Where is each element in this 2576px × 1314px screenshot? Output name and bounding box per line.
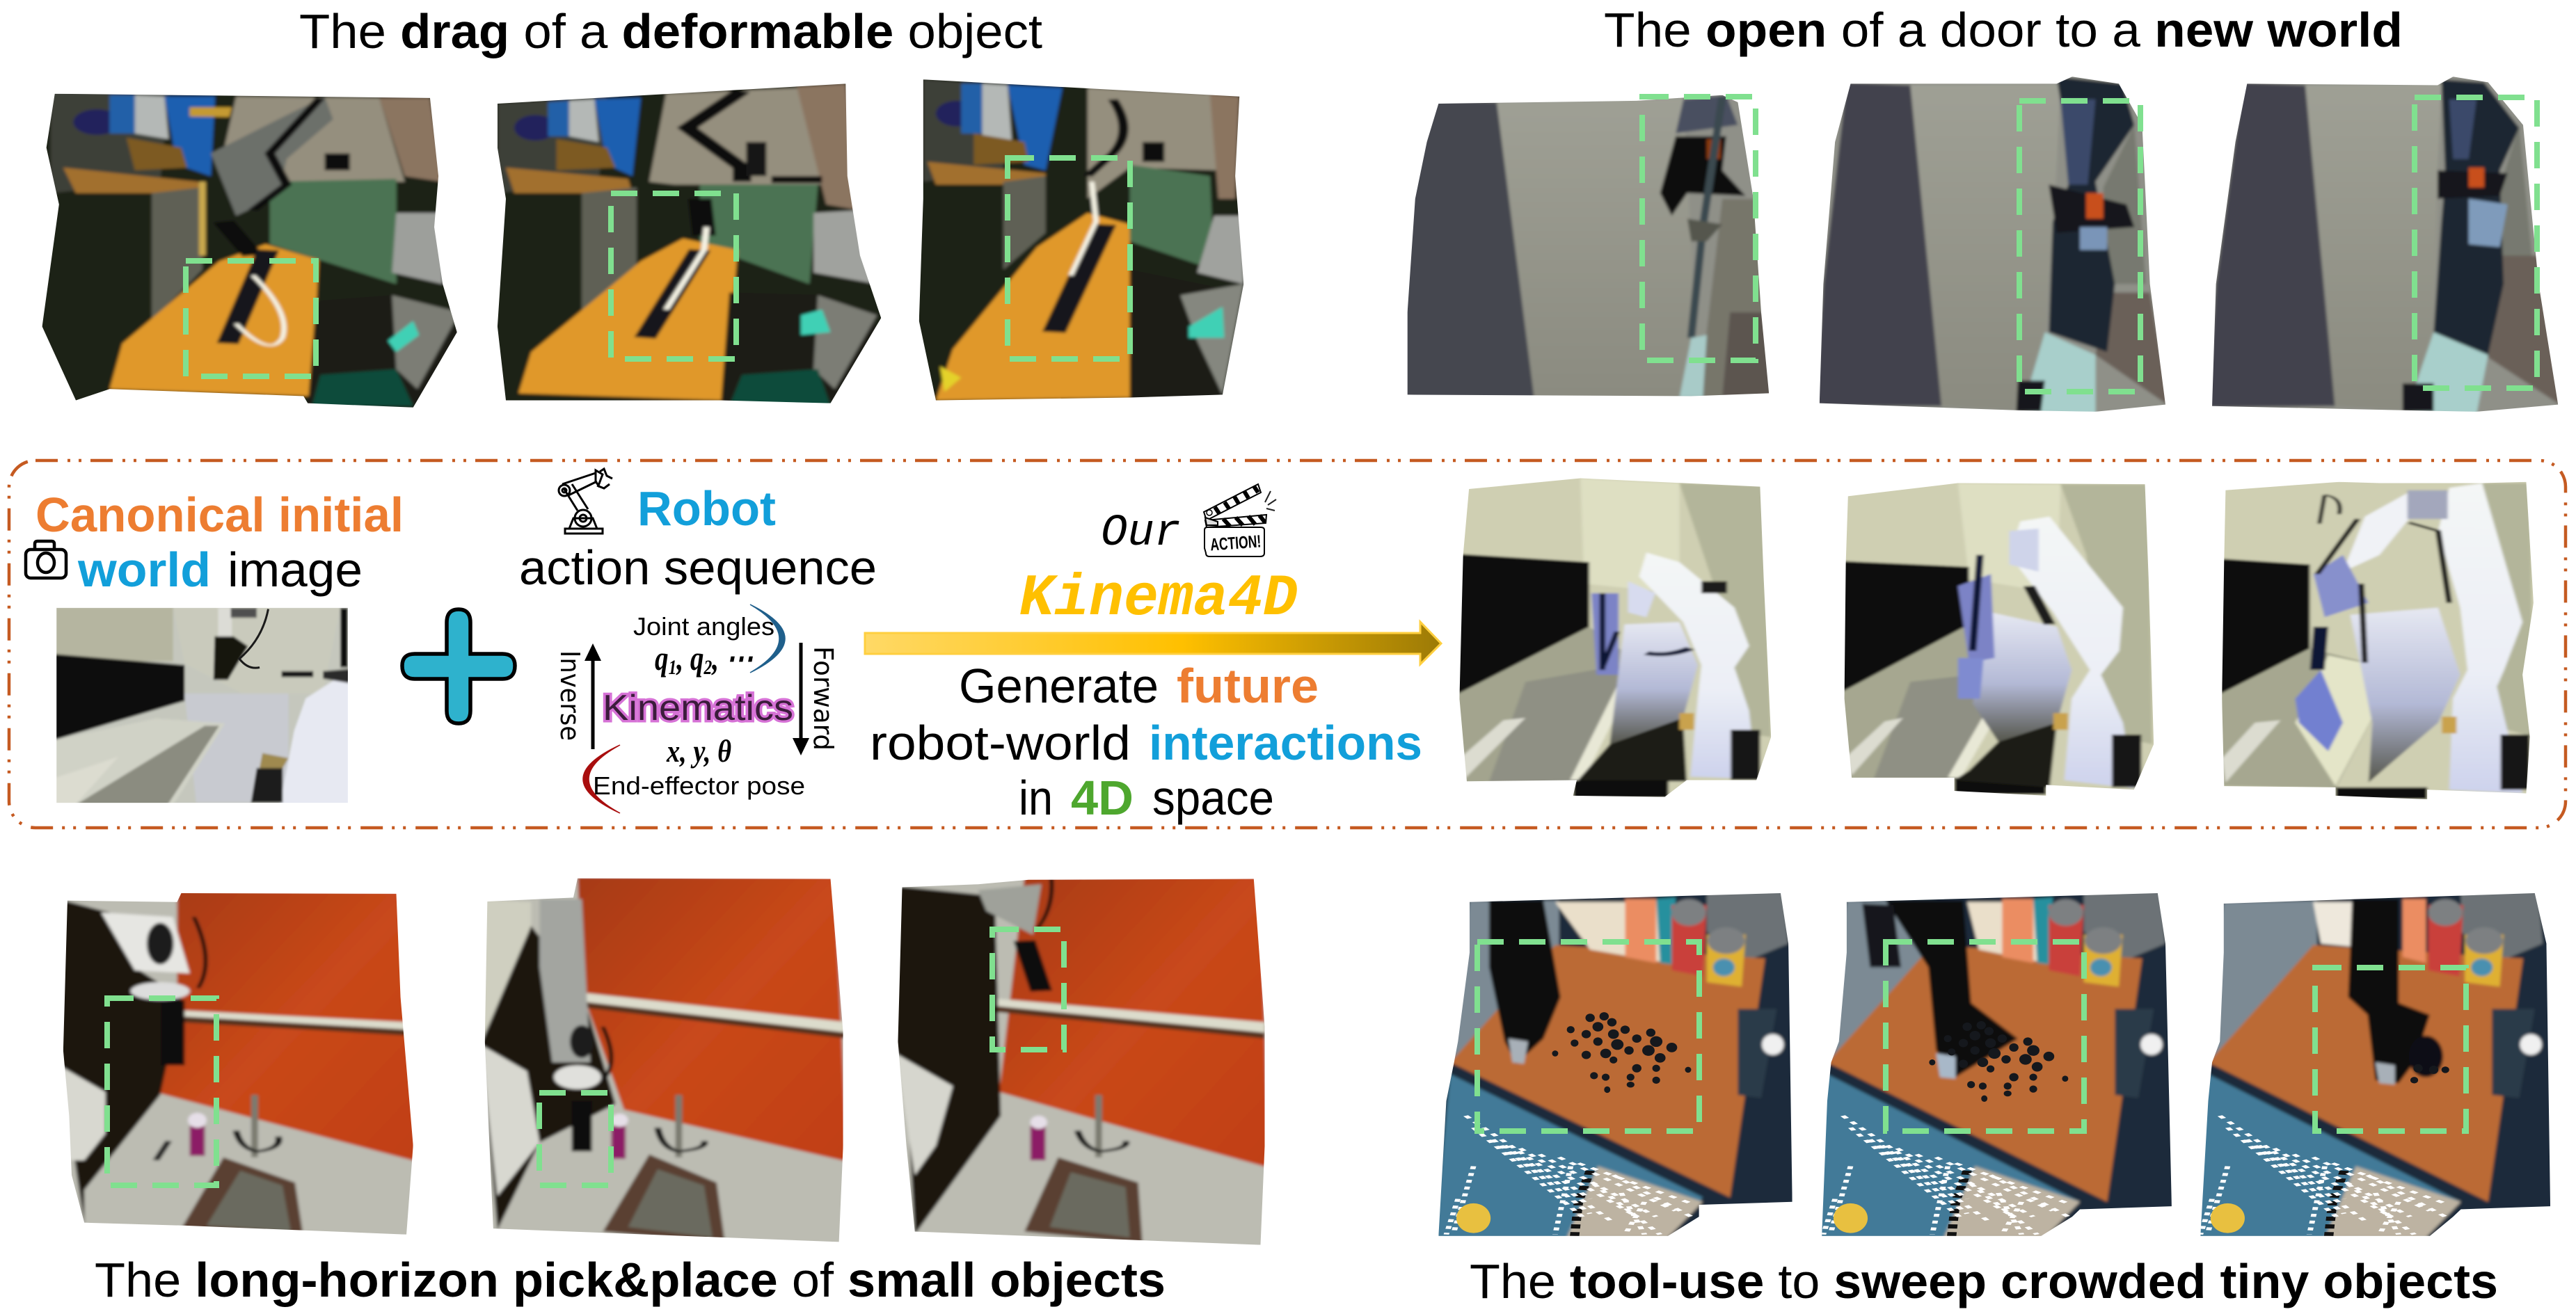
icon: clapperboard: ACTION!	[1209, 531, 1262, 554]
frame: generated step 2	[1834, 481, 2163, 799]
joint symbols: 2	[703, 656, 712, 679]
icon: clapperboard	[1204, 484, 1276, 556]
text: generate future: future	[1177, 659, 1319, 713]
arrow: forward	[793, 643, 809, 755]
text: in 4D space: 4D	[1071, 771, 1134, 825]
heading: drag: The drag of a deformable object	[299, 4, 1042, 58]
joint symbols: q	[655, 639, 672, 678]
heading: world image: world	[77, 543, 211, 597]
highlight boxes: pick	[107, 929, 1064, 1185]
heading: tool-use: The tool-use to sweep crowded tiny objects	[1470, 1254, 2498, 1308]
arrow: inverse	[585, 643, 601, 749]
kinematics diagram	[555, 604, 838, 813]
joint symbols: 1	[669, 656, 676, 679]
frame: drag step 2	[481, 79, 893, 406]
initial world image	[52, 607, 352, 806]
text: in 4D space: in	[1019, 771, 1053, 825]
joint symbols: , q	[676, 639, 704, 678]
end effector label: End-effector pose	[593, 771, 805, 800]
heading: robot: Robot	[637, 481, 776, 536]
text: generate future: Generate	[959, 659, 1159, 713]
frame: pick step 1	[51, 890, 422, 1237]
label: our: Our	[1101, 508, 1181, 559]
pose symbols: x, y, θ	[666, 733, 731, 769]
heading: open: The open of a door to a new world	[1604, 3, 2403, 57]
icon: plus	[402, 609, 515, 723]
heading: world image	[77, 543, 363, 597]
frame: sweep step 2	[1812, 890, 2185, 1239]
frame: pick step 3	[885, 875, 1282, 1249]
highlight boxes: drag	[186, 158, 1130, 376]
frame: drag step 3	[903, 77, 1256, 403]
heading: canonical initial: Canonical initial	[35, 488, 404, 542]
label: forward: Forward	[808, 646, 838, 751]
arrow: generation	[865, 622, 1441, 664]
panel: drag of a deformable object	[25, 4, 1256, 415]
text: robot-world interactions	[870, 716, 1422, 770]
joint symbols: , ⋯	[711, 639, 753, 678]
text: robot-world interactions: interactions	[1149, 716, 1422, 770]
highlight boxes: door	[1642, 97, 2537, 392]
title: Kinema4D: Kinema4D	[1019, 566, 1298, 632]
frame: door step 2	[1808, 74, 2181, 415]
icon: camera	[26, 541, 66, 578]
frame: generated step 1	[1449, 476, 1786, 799]
dashed frame	[9, 460, 2566, 828]
label: kinematics: Kinematics	[603, 688, 793, 728]
panel: open a door	[1388, 3, 2574, 415]
frame: door step 1	[1407, 95, 1769, 396]
panel: pick and place	[51, 875, 1282, 1307]
frame: drag step 1	[42, 93, 457, 408]
text: robot-world interactions: robot-world	[870, 716, 1131, 770]
frame: sweep step 3	[2193, 890, 2566, 1239]
arc: pose	[583, 745, 620, 813]
heading: world image: image	[228, 543, 363, 597]
frame: sweep step 1	[1427, 890, 1800, 1239]
text: generate future	[959, 659, 1319, 713]
text: in 4D space	[1019, 771, 1274, 825]
text: in 4D space: space	[1152, 771, 1274, 825]
panel: tool use sweep	[1427, 890, 2566, 1308]
panel: central pipeline	[9, 460, 2566, 828]
icon: robot arm	[559, 469, 612, 534]
label: inverse: Inverse	[555, 650, 585, 741]
frame: generated step 3	[2211, 481, 2541, 801]
highlight boxes: sweep	[1477, 942, 2466, 1131]
arc: joint	[750, 604, 785, 673]
heading: long-horizon pick&place: The long-horizon pick&place of small objects	[95, 1253, 1166, 1307]
frame: pick step 2	[472, 875, 860, 1247]
heading: action sequence: action sequence	[519, 540, 877, 595]
joint angles label: Joint angles	[633, 612, 774, 641]
frame: door step 3	[2200, 74, 2574, 415]
